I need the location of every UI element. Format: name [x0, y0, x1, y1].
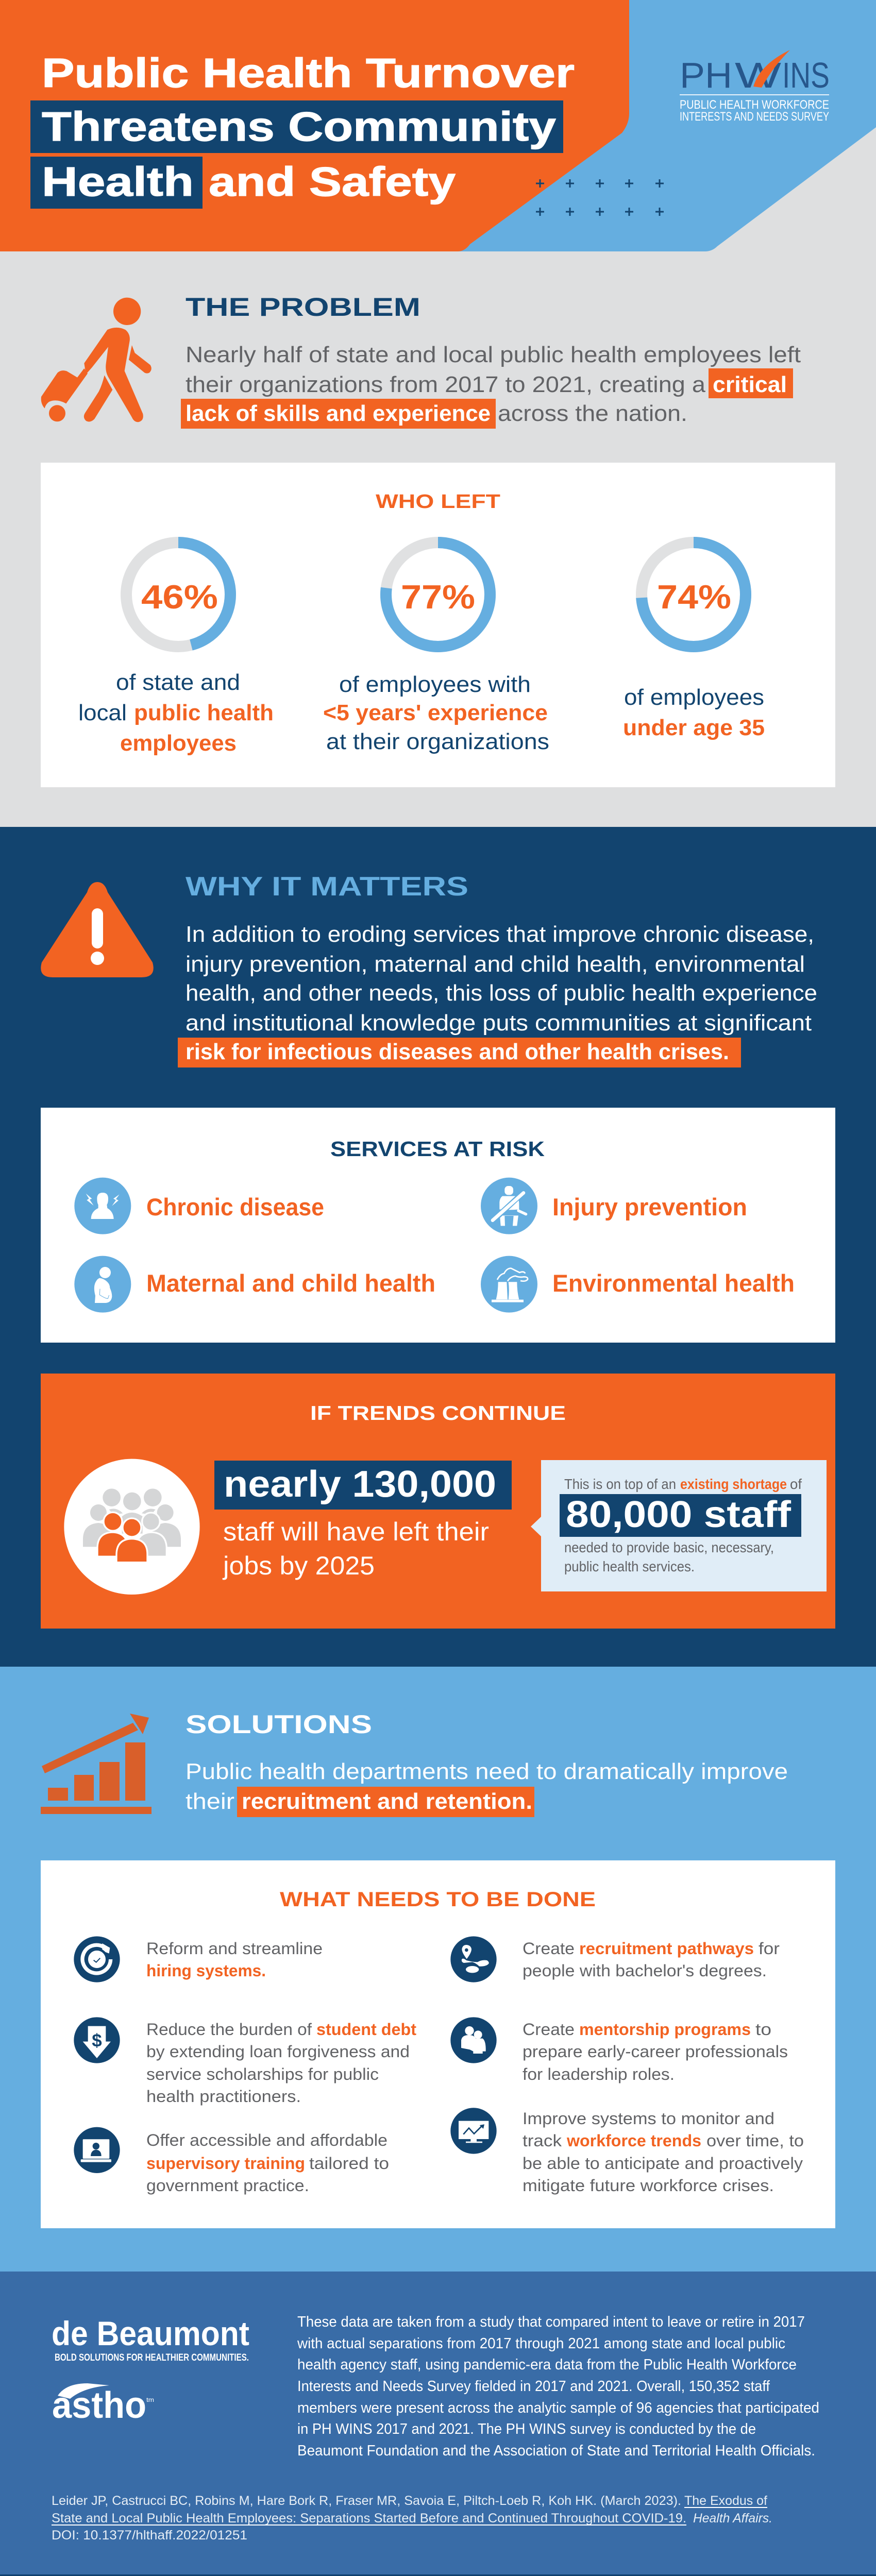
text block: citation: Health Affairs. — [693, 2511, 772, 2526]
heading: if trends continue: IF TRENDS CONTINUE — [310, 1402, 566, 1425]
text block: solutions statement: their — [186, 1789, 234, 1814]
text: workforce trends: mitigate future workforce crises. — [523, 2176, 774, 2195]
text: 77 percent caption: at their organizations — [326, 729, 549, 754]
icon: student debt down arrow — [74, 2017, 120, 2063]
text: recruitment pathways: Create — [523, 1939, 575, 1958]
text block: problem statement: critical — [713, 372, 787, 397]
icon: laptop training — [74, 2127, 120, 2173]
text block: problem statement: their organizations from 2017 to 2021, creating a — [186, 372, 706, 397]
logo: PH WINS — [680, 50, 830, 124]
text: supervisory training: Offer accessible and affordable — [146, 2131, 388, 2149]
label: environmental health: Environmental health — [552, 1269, 795, 1297]
text block: about the data: Beaumont Foundation and the Association of State and Territorial Health Officials. — [297, 2443, 815, 2459]
panel: footer sources — [0, 2272, 876, 2574]
panel: footer website bar — [0, 2574, 876, 2576]
heading: services at risk: SERVICES AT RISK — [330, 1137, 545, 1161]
text: mentorship programs: for leadership roles. — [523, 2065, 675, 2083]
text: 77 percent caption: <5 years' experience — [323, 700, 548, 725]
text: 46 percent caption: local — [78, 700, 127, 725]
logo: PH WINS: PUBLIC HEALTH WORKFORCE — [680, 98, 829, 112]
text block: why it matters: In addition to eroding services that improve chronic disease, — [186, 922, 814, 947]
text: mentorship programs: mentorship programs — [579, 2020, 751, 2039]
text block: why it matters: risk for infectious diseases and other health crises. — [186, 1039, 729, 1064]
chart: 46 percent ring — [126, 543, 230, 647]
text: 46 percent caption — [78, 670, 274, 756]
chart: 77 percent ring — [386, 543, 490, 647]
title: and Safety — [209, 159, 456, 205]
text: mentorship programs: prepare early-career professionals — [523, 2042, 788, 2061]
heading: the problem: THE PROBLEM — [186, 293, 420, 321]
text: workforce trends: Improve systems to monitor and — [523, 2109, 774, 2128]
heading: solutions: SOLUTIONS — [186, 1710, 372, 1739]
stat: nearly 130,000: nearly 130,000 — [224, 1464, 496, 1505]
text: supervisory training: supervisory training — [146, 2154, 305, 2173]
title: Threatens Community — [42, 104, 557, 149]
text block: about the data: health agency staff, using pandemic-era data from the Public Health Workforce — [297, 2357, 797, 2373]
logo: astho: tm — [146, 2396, 154, 2403]
text: supervisory training: tailored to — [309, 2154, 389, 2173]
text block: citation — [52, 2494, 772, 2543]
text block: why it matters: and institutional knowledge puts communities at significant — [186, 1010, 812, 1036]
text: hiring systems: hiring systems. — [146, 1961, 266, 1980]
text block: solutions statement: recruitment and retention. — [242, 1789, 532, 1814]
text: student debt: student debt — [316, 2020, 416, 2039]
text: hiring systems: Reform and streamline — [146, 1939, 323, 1958]
text block: problem statement: across the nation. — [498, 401, 687, 426]
title: Public Health Turnover — [42, 50, 575, 96]
text: 74 percent caption: under age 35 — [623, 715, 765, 740]
icon: chronic disease — [74, 1178, 131, 1234]
callout: existing shortage of 80,000 staff: of — [790, 1476, 802, 1492]
text block: citation: The Exodus of — [684, 2494, 767, 2508]
callout: existing shortage of 80,000 staff: public health services. — [564, 1558, 695, 1574]
panel: services at risk — [41, 1108, 835, 1343]
callout: existing shortage of 80,000 staff: existing shortage — [680, 1476, 787, 1492]
text: mentorship programs: to — [755, 2020, 771, 2039]
panel: header — [0, 0, 876, 251]
text: workforce trends: be able to anticipate and proactively — [523, 2154, 803, 2173]
heading: who left: WHO LEFT — [376, 491, 500, 513]
icon: recruitment pathway pin — [450, 1936, 497, 1982]
text: supervisory training: government practice. — [146, 2176, 309, 2195]
text: supervisory training — [146, 2131, 389, 2195]
text: 77 percent caption — [323, 672, 549, 754]
text block: about the data: members were present across the analytic sample of 96 agencies that participated — [297, 2400, 819, 2416]
text: mentorship programs — [523, 2020, 788, 2083]
text block: about the data: with actual separations from 2017 through 2021 among state and local public — [297, 2335, 785, 2352]
text: mentorship programs: Create — [523, 2020, 575, 2039]
icon: seat belt — [481, 1178, 537, 1234]
text: 74 percent caption: of employees — [624, 685, 764, 710]
text: hiring systems — [146, 1939, 323, 1980]
text: student debt: Reduce the burden of — [146, 2020, 312, 2039]
icon: rising bar chart — [41, 1714, 151, 1814]
text: workforce trends — [523, 2109, 804, 2195]
text block: about the data: in PH WINS 2017 and 2021. The PH WINS survey is conducted by the de — [297, 2421, 756, 2437]
chart: 74 percent ring: 74% — [657, 578, 731, 616]
text: 46 percent caption: of state and — [116, 670, 240, 695]
heading: why it matters: WHY IT MATTERS — [186, 872, 468, 902]
text: student debt — [146, 2020, 416, 2106]
chart: 74 percent ring — [642, 543, 746, 647]
text block: problem statement: Nearly half of state and local public health employees left — [186, 342, 801, 367]
icon: monitor with trend line — [450, 2108, 497, 2154]
text block: citation: Leider JP, Castrucci BC, Robins M, Hare Bork R, Fraser MR, Savoia E, Piltch-Loeb R, Koh HK. (March 2023). — [52, 2494, 681, 2508]
text block: about the data: These data are taken from a study that compared intent to leave or retire in 2017 — [297, 2314, 805, 2330]
text: student debt: by extending loan forgiveness and — [146, 2042, 410, 2061]
logo: astho: astho — [52, 2385, 146, 2426]
logo: de Beaumont: BOLD SOLUTIONS FOR HEALTHIER COMMUNITIES. — [55, 2352, 249, 2363]
heading: what needs to be done: WHAT NEEDS TO BE DONE — [280, 1888, 596, 1911]
text: 46 percent caption: public health — [134, 700, 274, 725]
text block: why it matters: injury prevention, maternal and child health, environmental — [186, 952, 805, 977]
label: chronic disease: Chronic disease — [146, 1193, 324, 1221]
callout: existing shortage of 80,000 staff: 80,000 staff — [566, 1494, 791, 1535]
text block: about the data — [297, 2314, 819, 2459]
chart: 46 percent ring: 46% — [141, 578, 218, 616]
logo: PH WINS: W — [735, 55, 781, 95]
title: Health — [42, 159, 194, 205]
text: student debt: service scholarships for public — [146, 2065, 379, 2083]
panel: if trends continue — [41, 1374, 835, 1629]
icon: student debt down arrow: $ — [92, 2031, 102, 2051]
chart: 77 percent ring: 77% — [401, 578, 475, 616]
callout: existing shortage of 80,000 staff: This is on top of an — [564, 1476, 676, 1492]
icon: hiring cycle check — [74, 1936, 120, 1982]
logo: PH WINS: INTERESTS AND NEEDS SURVEY — [680, 110, 829, 124]
panel: solutions — [0, 1667, 876, 2272]
text block: why it matters: health, and other needs, this loss of public health experience — [186, 980, 817, 1006]
text: 74 percent caption — [623, 685, 765, 740]
text: workforce trends: workforce trends — [566, 2131, 701, 2150]
title — [30, 50, 575, 209]
callout: existing shortage of 80,000 staff: needed to provide basic, necessary, — [564, 1539, 774, 1555]
panel: the problem — [0, 251, 876, 827]
panel: why it matters — [0, 827, 876, 1667]
text block: citation: State and Local Public Health Employees: Separations Started Before and Continued Throughout COVID-19. — [52, 2511, 686, 2526]
text: recruitment pathways — [523, 1939, 780, 1980]
logo: de Beaumont: de Beaumont — [52, 2314, 249, 2352]
text: recruitment pathways: recruitment pathways — [579, 1939, 754, 1958]
text block: problem statement — [181, 342, 801, 429]
text block: about the data: Interests and Needs Survey fielded in 2017 and 2021. Overall, 150,352 staff — [297, 2378, 770, 2395]
text block: solutions statement: Public health departments need to dramatically improve — [186, 1759, 788, 1784]
panel: who left — [41, 463, 835, 787]
icon: factory smoke — [481, 1256, 537, 1313]
icon: group of people — [64, 1459, 200, 1595]
text block: why it matters — [178, 922, 817, 1067]
icon: warning triangle — [41, 882, 154, 977]
callout: existing shortage of 80,000 staff — [531, 1460, 827, 1591]
text: 46 percent caption: employees — [120, 731, 237, 756]
icon: mentorship people — [450, 2017, 497, 2063]
text: workforce trends: track — [523, 2131, 562, 2150]
logo: PH WINS: INS — [782, 55, 830, 95]
stat: nearly 130,000 — [214, 1461, 512, 1580]
stat: nearly 130,000: staff will have left their — [223, 1517, 489, 1546]
text: 77 percent caption: of employees with — [339, 672, 531, 697]
text block: solutions statement — [186, 1759, 788, 1817]
text: student debt: health practitioners. — [146, 2087, 301, 2106]
text: workforce trends: over time, to — [706, 2131, 804, 2150]
icon: pregnant person — [74, 1256, 131, 1313]
text block: citation: DOI: 10.1377/hlthaff.2022/01251 — [52, 2528, 247, 2543]
label: maternal and child health: Maternal and child health — [146, 1269, 435, 1297]
icon: traveller walking with suitcase — [41, 298, 151, 422]
stat: nearly 130,000: jobs by 2025 — [222, 1551, 375, 1580]
text block: problem statement: lack of skills and experience — [186, 401, 491, 426]
text: recruitment pathways: for — [759, 1939, 780, 1958]
label: injury prevention: Injury prevention — [552, 1193, 747, 1221]
logo: PH WINS: PH — [680, 55, 732, 95]
panel: what needs to be done — [41, 1860, 835, 2228]
text: recruitment pathways: people with bachelor's degrees. — [523, 1961, 767, 1980]
